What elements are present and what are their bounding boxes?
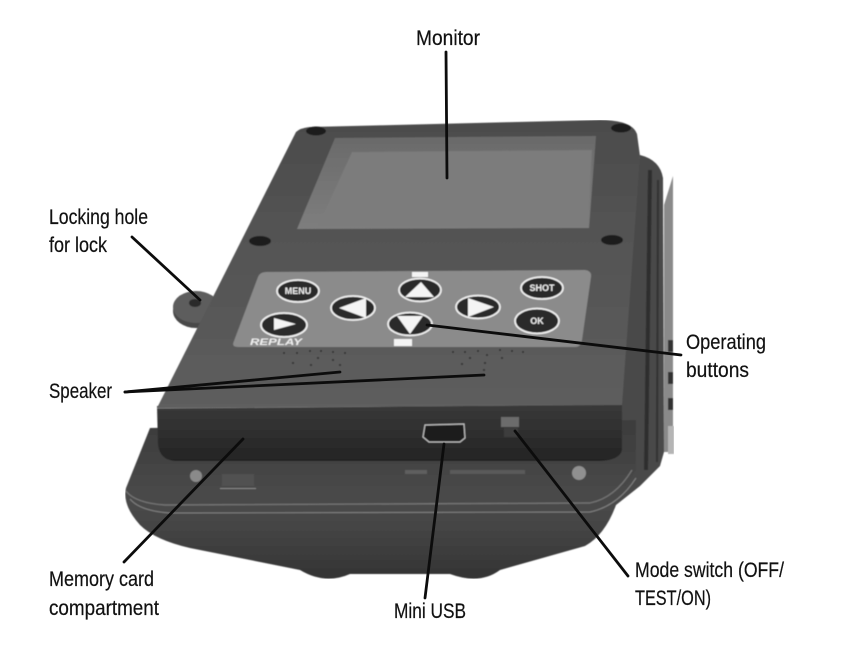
monitor screen <box>297 136 596 229</box>
side rail of housing <box>600 155 664 505</box>
SD mark <box>222 474 254 486</box>
device photo: trail camera: OK <box>530 316 544 326</box>
callout: Operating buttons <box>427 325 766 382</box>
callout: Mini USB <box>394 444 466 623</box>
callout: Mode switch: TEST/ON) <box>635 587 711 610</box>
callout: Speaker: Speaker <box>49 380 112 403</box>
lock tab <box>173 291 219 328</box>
button panel <box>233 270 591 347</box>
callout: Mini USB: Mini USB <box>394 600 466 623</box>
USB and switch marks <box>405 470 427 474</box>
housing bottom <box>125 420 636 579</box>
callout: Operating buttons: Operating <box>686 331 766 354</box>
callout: Mode switch <box>515 431 784 610</box>
callout: Locking hole: for lock <box>49 234 107 257</box>
mode switch <box>501 417 519 427</box>
device photo: trail camera: MENU <box>285 286 311 296</box>
device photo: trail camera: REPLAY <box>250 337 303 347</box>
right side latches <box>664 176 673 452</box>
speaker holes <box>283 349 524 371</box>
screws on housing <box>190 470 202 482</box>
top face <box>157 120 640 408</box>
callout: Monitor: Monitor <box>416 27 480 50</box>
callout: Speaker <box>49 372 484 403</box>
callout: Memory card compartment: Memory card <box>49 568 154 591</box>
callout: Memory card compartment <box>49 439 243 620</box>
callout: Locking hole <box>49 206 200 300</box>
buttons <box>261 277 563 337</box>
callout: Locking hole: Locking hole <box>49 206 148 229</box>
device photo: trail camera: SHOT <box>529 283 555 293</box>
callout: Mode switch: Mode switch (OFF/ <box>635 559 784 582</box>
callout: Memory card compartment: compartment <box>49 597 159 620</box>
mini USB port <box>423 424 465 442</box>
front face of monitor block <box>157 402 622 461</box>
callout: Operating buttons: buttons <box>686 359 749 382</box>
screw holes <box>249 124 631 246</box>
device photo: trail camera <box>125 120 674 579</box>
